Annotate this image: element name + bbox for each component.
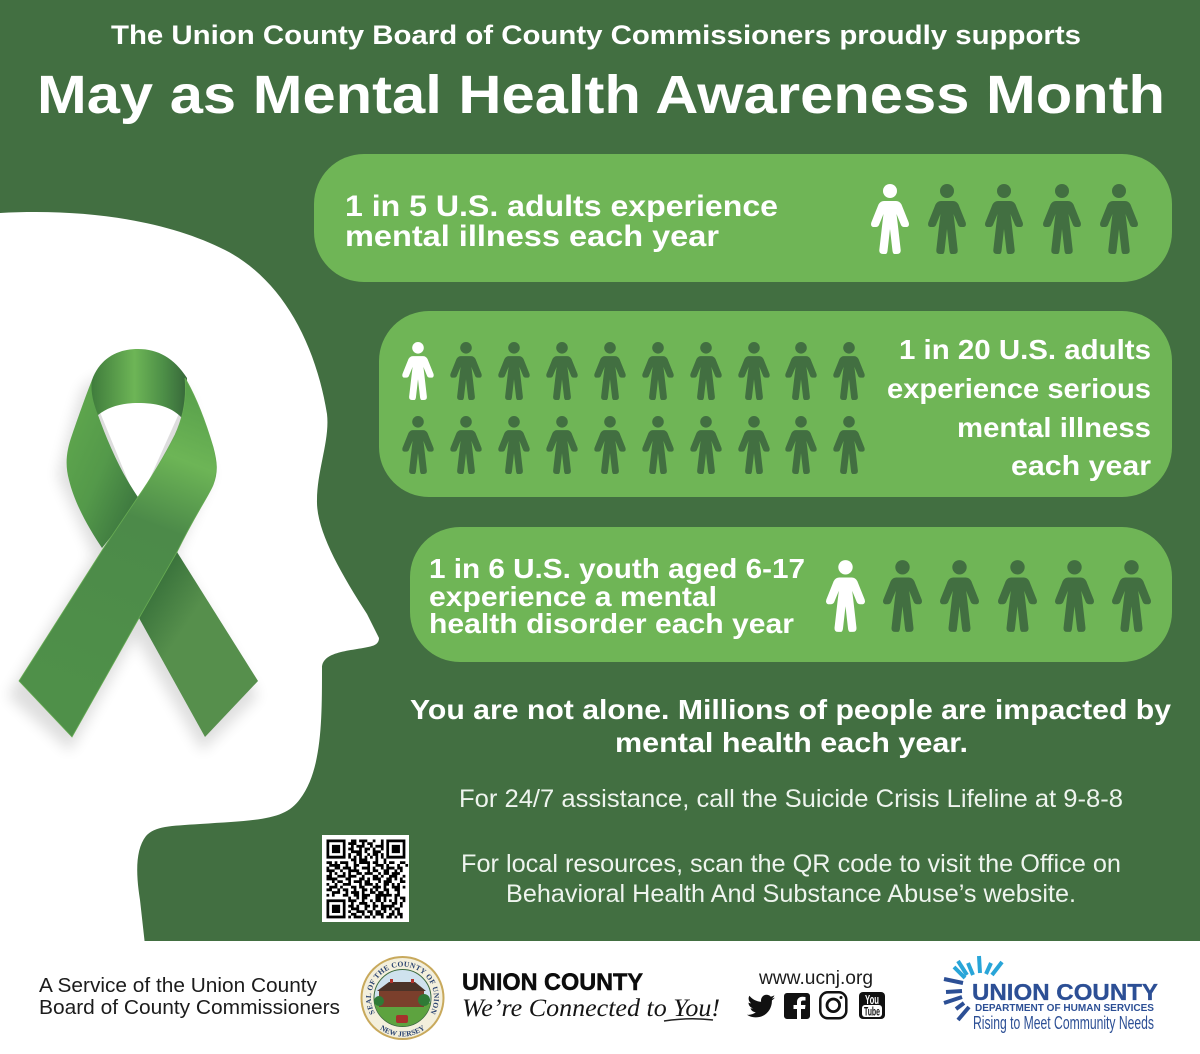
panel: 1 in 6 youth: [410, 527, 1172, 662]
ribbon left loop: [67, 380, 140, 548]
ribbon shadow: [8, 358, 258, 751]
panel background: [379, 311, 1172, 497]
heading: main title: May as Mental Health Awareness Month: [37, 65, 1165, 125]
panel text: [429, 553, 805, 639]
ribbon right leg: [139, 552, 258, 737]
panel: 1 in 5 adults: [314, 154, 1172, 282]
icons: five people, one highlighted: [871, 184, 1138, 254]
head silhouette: [0, 212, 379, 945]
panel text: [887, 334, 1151, 481]
footer: county wordmark: UNION COUNTY: [462, 969, 643, 996]
panel text: mental illness each year: [345, 220, 719, 253]
icon: youtube: You: [865, 992, 879, 1007]
panel text: health disorder each year: [429, 608, 794, 639]
icon: instagram: [820, 992, 846, 1018]
footer: human services logo: DEPARTMENT OF HUMAN SERVICES: [975, 1003, 1154, 1014]
footer: human services logo: [944, 956, 1158, 1033]
icon: facebook: [784, 993, 810, 1019]
footer: service statement: Board of County Commissioners: [39, 997, 340, 1019]
QR code: [322, 835, 409, 922]
icon: youtube: [859, 992, 885, 1019]
icon: sunburst rays: [944, 956, 1002, 1020]
text: local resources: [461, 850, 1121, 908]
text: you are not alone: mental health each year.: [615, 727, 968, 758]
panel text: 1 in 5 U.S. adults experience: [345, 190, 778, 223]
footer: human services logo: UNION COUNTY: [972, 979, 1158, 1005]
panel background: [314, 154, 1172, 282]
awareness ribbon: [8, 349, 258, 751]
footer: county wordmark: We’re Connected to You!: [462, 995, 720, 1022]
footer: website: www.ucnj.org: [758, 968, 873, 989]
text: local resources: Behavioral Health And Substance Abuse’s website.: [506, 880, 1076, 908]
footer: county wordmark: [462, 969, 720, 1022]
footer: service statement: [39, 975, 340, 1019]
icons: twenty people, one highlighted: [402, 342, 865, 474]
panel text: 1 in 20 U.S. adults: [899, 334, 1151, 365]
ribbon front band: [19, 378, 216, 737]
panel text: [345, 190, 778, 253]
panel text: each year: [1011, 450, 1151, 481]
icon: youtube: Tube: [864, 1004, 880, 1018]
text: you are not alone: [410, 694, 1171, 758]
text: local resources: For local resources, scan the QR code to visit the Office on: [461, 850, 1121, 878]
footer: county seal: SEAL OF THE COUNTY OF UNION: [366, 962, 439, 1015]
footer: county seal: [360, 956, 444, 1040]
title: [37, 20, 1165, 125]
panel text: 1 in 6 U.S. youth aged 6-17: [429, 553, 805, 584]
panel text: experience a mental: [429, 581, 717, 612]
text: you are not alone: You are not alone. Millions of people are impacted by: [410, 694, 1171, 725]
panel: 1 in 20 adults: [379, 311, 1172, 497]
footer: service statement: A Service of the Union County: [39, 975, 317, 997]
panel background: [410, 527, 1172, 662]
ribbon hole highlight: [95, 400, 185, 505]
panel text: experience serious: [887, 373, 1151, 404]
heading: supporting line: The Union County Board of County Commissioners proudly supports: [111, 20, 1081, 50]
ribbon loop back: [91, 349, 187, 420]
panel text: mental illness: [957, 412, 1151, 443]
icons: six people, one highlighted: [826, 560, 1151, 632]
footer band: [0, 941, 1200, 1054]
icon: twitter: [747, 995, 775, 1017]
footer: social icons: [747, 992, 885, 1019]
footer: county seal: NEW JERSEY: [380, 1025, 424, 1036]
text: crisis lifeline: For 24/7 assistance, call the Suicide Crisis Lifeline at 9-8-8: [459, 785, 1123, 813]
